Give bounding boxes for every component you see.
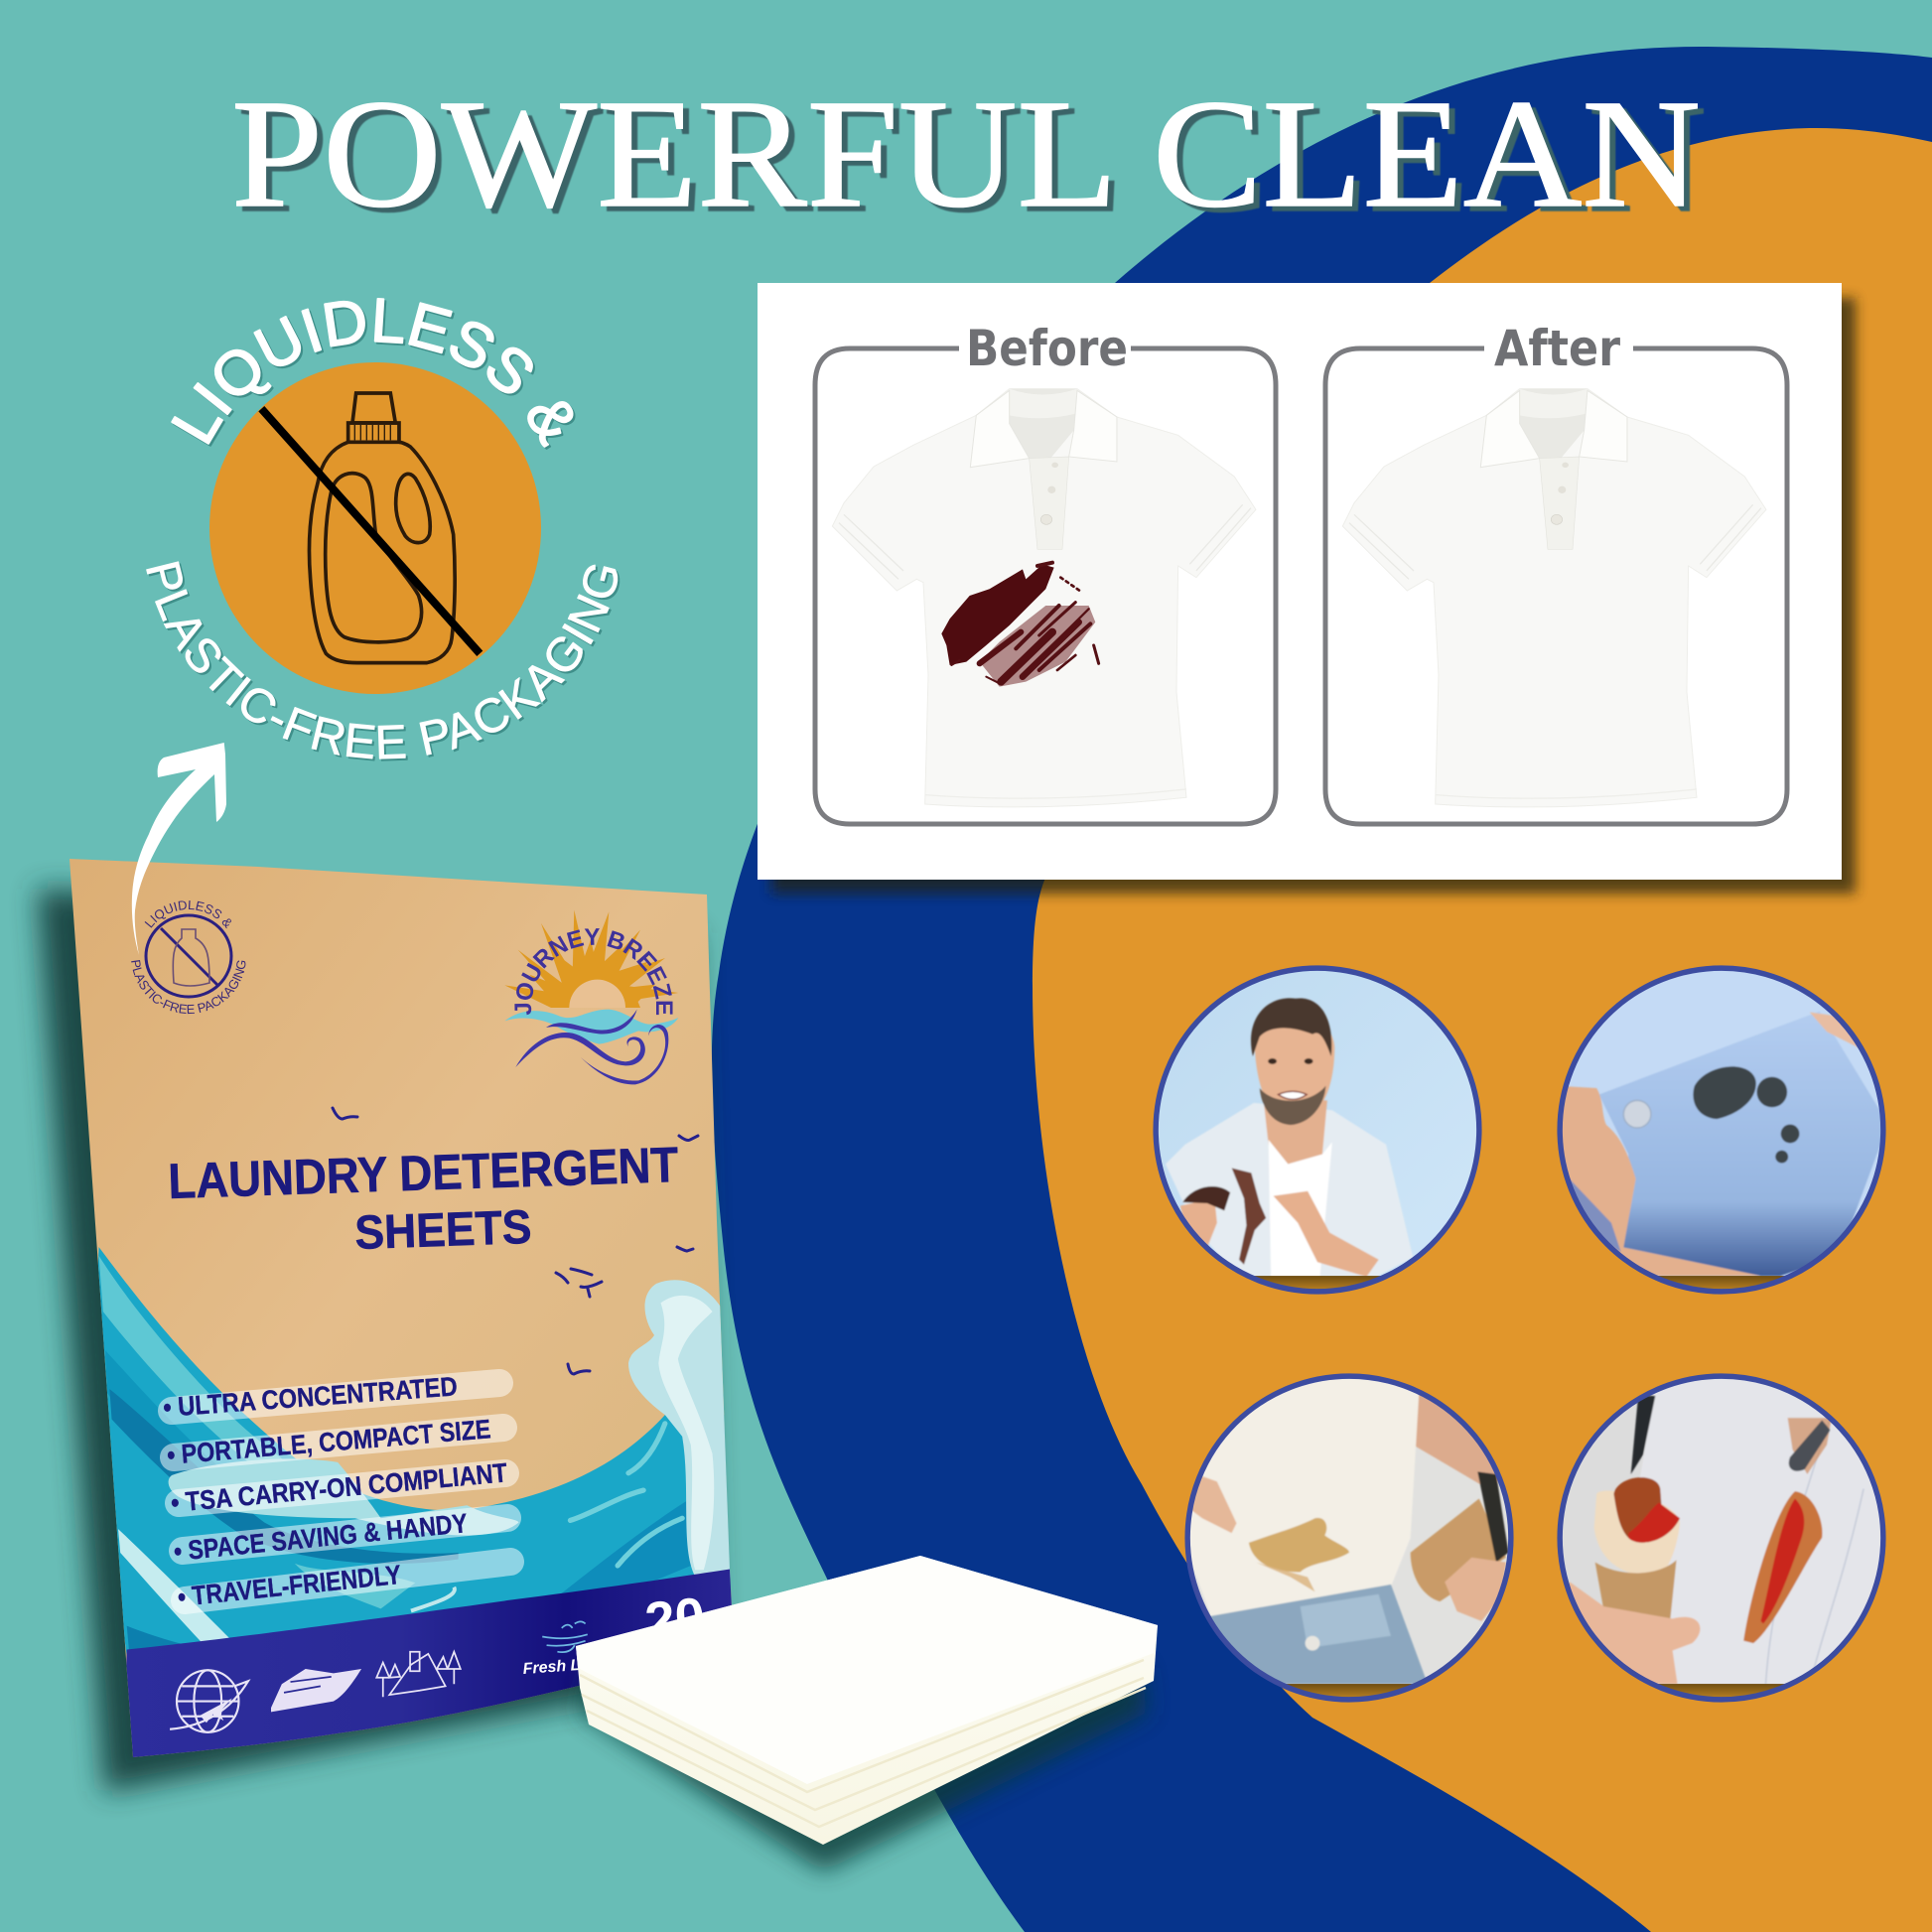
finger: [1810, 1013, 1862, 1049]
panel shadow: [771, 298, 1856, 894]
bottom strip: [1658, 1276, 1785, 1289]
waves: [504, 1010, 678, 1044]
coffee stain: [1249, 1518, 1349, 1573]
feature list: • TRAVEL-FRIENDLY: [177, 1560, 402, 1612]
photo: blue shirt ink stain: [1555, 963, 1888, 1296]
hoodie: [1638, 1371, 1888, 1684]
sausage: [1613, 1477, 1680, 1543]
before shirt: [832, 389, 1256, 807]
neck: [1264, 1100, 1327, 1165]
panel background: [758, 283, 1842, 880]
package heading: [168, 1137, 679, 1260]
right hand: [1445, 1558, 1506, 1621]
package heading: SHEETS: [354, 1201, 532, 1260]
shirt: [1166, 1103, 1413, 1277]
splash: [628, 1280, 736, 1579]
birds: [333, 1108, 698, 1374]
left hand: [1182, 1469, 1236, 1533]
package artwork: [60, 854, 745, 1781]
feature list: • PORTABLE, COMPACT SIZE: [166, 1414, 491, 1470]
panel: before and after: [758, 283, 1856, 894]
hands: [1180, 1198, 1217, 1247]
icon: cruise ship: [271, 1669, 361, 1712]
purple band: [126, 1569, 732, 1757]
bun: [1594, 1490, 1680, 1577]
detergent sheets stack: [576, 1556, 1158, 1871]
after label: After: [1494, 320, 1620, 377]
cup: [1411, 1499, 1506, 1601]
sheet layer lines: [580, 1660, 1146, 1827]
ink stains: [1693, 1066, 1756, 1119]
icon: globe and plane: [170, 1670, 248, 1732]
pack size: 20: [642, 1587, 708, 1652]
hand: [1555, 1582, 1700, 1684]
title: POWERFUL CLEAN: [231, 68, 1701, 239]
badge: liquidless and plastic-free: [146, 298, 620, 761]
sun rays: [504, 910, 678, 1008]
stain: [1232, 1168, 1266, 1265]
photo: man with chocolate stain: [1151, 963, 1484, 1296]
badge bottom text: PLASTIC-FREE PACKAGING: [146, 561, 620, 761]
icon: cabin and trees: [376, 1652, 461, 1697]
arrow: [132, 743, 226, 955]
bottom strip: [1255, 1276, 1380, 1289]
donut: [1182, 1186, 1230, 1210]
button: [1623, 1100, 1651, 1128]
feature list: [162, 1371, 509, 1612]
logo name: JOURNEY BREEZE: [514, 928, 673, 1015]
bottom strip: [1555, 1684, 1888, 1704]
package shadow: [38, 889, 715, 1792]
tee: [1269, 1140, 1332, 1277]
badge top text: LIQUIDLESS &: [171, 298, 576, 450]
head: [1255, 1014, 1334, 1124]
background swoosh: navy: [712, 47, 1932, 1932]
background swoosh: orange: [1033, 128, 1932, 1932]
after shirt: [1342, 389, 1766, 807]
tee: [1187, 1371, 1421, 1618]
before label: Before: [966, 320, 1128, 377]
skin: [1555, 1086, 1760, 1276]
package heading: LAUNDRY DETERGENT: [168, 1137, 679, 1209]
package body: [60, 854, 745, 1767]
feature list: • ULTRA CONCENTRATED: [162, 1371, 459, 1423]
product package: [20, 859, 733, 1807]
mini badge on package: [131, 900, 246, 1015]
mini badge on package: LIQUIDLESS &: [145, 900, 231, 929]
shirt flap: [1599, 1012, 1888, 1276]
feature list: • SPACE SAVING & HANDY: [173, 1508, 469, 1567]
after frame: [1325, 348, 1787, 824]
badge orange disc: [209, 362, 541, 694]
wave: [92, 1247, 734, 1656]
wrapper: [1595, 1560, 1677, 1621]
zipper: [1789, 1421, 1831, 1471]
sauce smear: [1743, 1491, 1823, 1643]
strap: [1631, 1396, 1655, 1474]
jeans: [1209, 1585, 1428, 1684]
wind icon: [542, 1621, 588, 1652]
logo: journey breeze: [504, 910, 679, 1084]
photo: ketchup stain: [1555, 1371, 1888, 1704]
bottom strip: [1182, 1684, 1516, 1704]
feature list: • TSA CARRY-ON COMPLIANT: [170, 1457, 509, 1518]
feature pills: [172, 1383, 510, 1600]
sheets shadow: [581, 1668, 1147, 1871]
stain: [941, 563, 1099, 687]
before frame: [815, 348, 1276, 824]
mini badge on package: PLASTIC-FREE PACKAGING: [131, 960, 246, 1015]
icon: crossed-out bottle: [261, 393, 480, 663]
arm: [1413, 1381, 1501, 1494]
sheets body: [576, 1556, 1158, 1845]
photo: coffee stain: [1182, 1371, 1516, 1704]
sheets top: [576, 1556, 1158, 1784]
fresh label: Fresh L: [522, 1657, 581, 1678]
